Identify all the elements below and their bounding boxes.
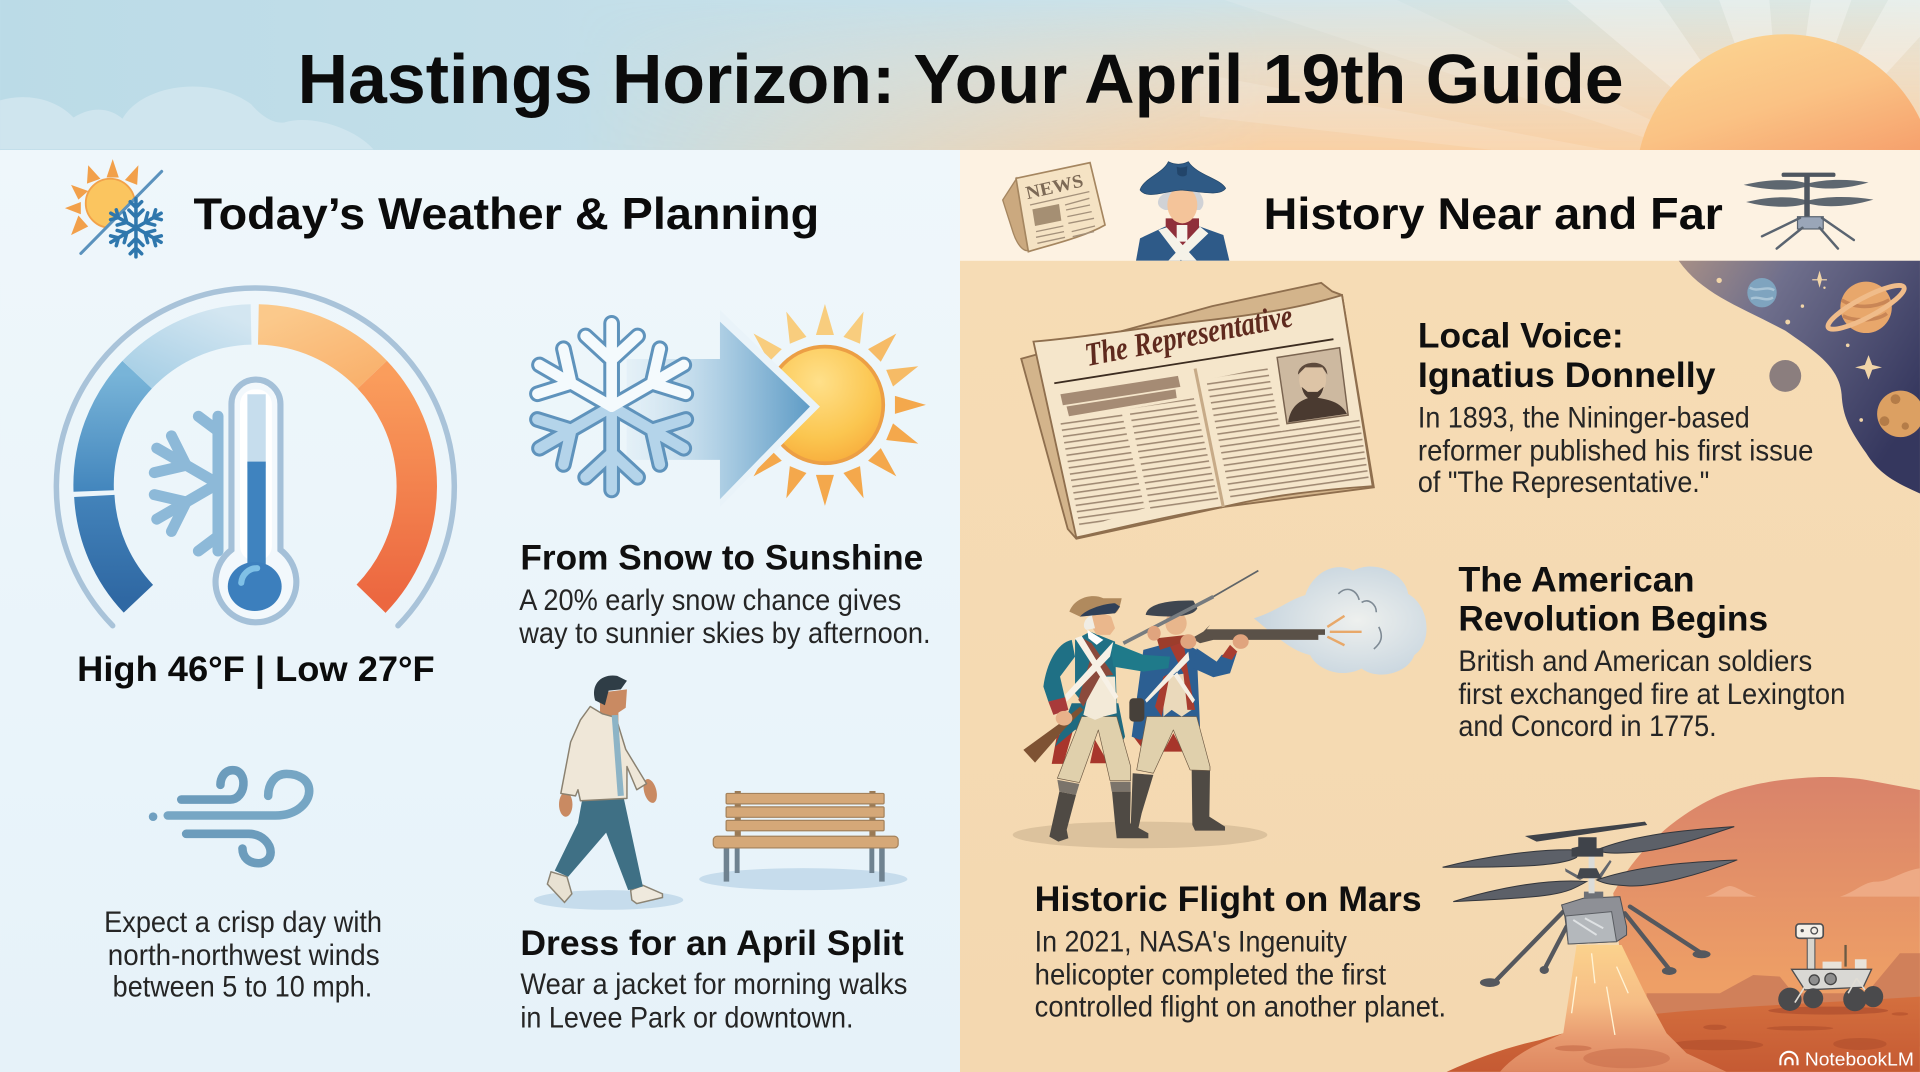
icon: thermometer — [216, 380, 296, 622]
text block: snow to sunshine: From Snow to Sunshine — [520, 537, 923, 577]
panel header: history — [960, 150, 1920, 261]
firing musket — [1192, 625, 1325, 643]
smoke cloud — [1254, 566, 1427, 675]
text block: mars flight: controlled flight on another planet. — [1035, 990, 1446, 1023]
illustration: The Representative newspaper — [1021, 283, 1374, 539]
text block: american revolution: and Concord in 1775. — [1458, 710, 1717, 743]
icon: walker — [534, 676, 683, 910]
hands — [559, 792, 572, 817]
snowflake — [526, 323, 697, 490]
text block: dress for april: in Levee Park or downtown. — [520, 1001, 853, 1034]
icon: colonial figure — [1136, 162, 1229, 261]
illustration: Ingenuity helicopter — [1443, 822, 1737, 987]
text block: mars flight: Historic Flight on Mars — [1035, 879, 1422, 919]
text block: local voice: Ignatius Donnelly — [1418, 355, 1716, 395]
text block: winds: north-northwest winds — [108, 939, 380, 972]
watermark: NotebookLM: NotebookLM — [1805, 1048, 1914, 1069]
text block: snow to sunshine: way to sunnier skies by afternoon. — [518, 617, 931, 650]
text block: local voice: Local Voice: — [1418, 316, 1624, 356]
text block: winds: between 5 to 10 mph. — [113, 971, 372, 1004]
text block: american revolution: first exchanged fire at Lexington — [1458, 678, 1845, 711]
text block: american revolution — [1458, 559, 1845, 743]
ringed planet — [1840, 282, 1892, 333]
text block: local voice — [1418, 316, 1813, 499]
sun rays — [1200, 0, 1920, 150]
front soldier — [1023, 596, 1170, 842]
temperature readout: High 46°F | Low 27°F — [77, 649, 435, 689]
text block: local voice: In 1893, the Nininger-based — [1418, 401, 1750, 434]
illustration: soldiers firing — [1013, 571, 1325, 848]
text block: american revolution: Revolution Begins — [1458, 599, 1768, 639]
portrait — [1277, 348, 1348, 424]
panel: history — [960, 261, 1920, 1072]
text block: snow to sunshine — [518, 537, 931, 650]
icon: snow to sun arrow — [526, 304, 926, 507]
illustration: rover — [1768, 924, 1888, 1015]
back soldier — [1129, 601, 1237, 831]
text block: mars flight: helicopter completed the first — [1035, 958, 1386, 991]
moon — [1769, 360, 1801, 392]
icon: half snowflake — [154, 416, 218, 551]
cratered planet — [1877, 391, 1920, 437]
icon: sun and snowflake — [65, 159, 165, 257]
stars — [1716, 271, 1882, 422]
text block: snow to sunshine: A 20% early snow chance gives — [519, 584, 901, 617]
bayonet musket — [1123, 597, 1213, 643]
title: Hastings Horizon: Your April 19th Guide — [298, 40, 1624, 118]
text block: winds — [104, 906, 382, 1004]
masthead title: The Representative — [1082, 298, 1296, 374]
text block: local voice: of "The Representative." — [1418, 466, 1709, 499]
panel: weather and planning — [0, 150, 960, 1072]
sun rays — [747, 304, 926, 506]
trousers — [555, 796, 643, 890]
text columns — [1060, 376, 1180, 405]
clouds — [0, 87, 373, 149]
thrust beam — [1500, 945, 1727, 1072]
heading: history: History Near and Far — [1264, 190, 1723, 239]
shoes — [547, 872, 572, 902]
blue planet — [1747, 278, 1777, 307]
space backdrop — [1679, 261, 1920, 493]
text block: mars flight — [1035, 879, 1446, 1023]
header banner — [0, 0, 1920, 150]
text block: dress for april: Dress for an April Split — [520, 923, 904, 963]
illustration: mars landscape — [1447, 777, 1920, 1072]
temperature gauge — [56, 288, 454, 626]
text block: dress for april: Wear a jacket for morning walks — [520, 968, 907, 1001]
header sun — [1640, 34, 1920, 150]
icon: small newspaper: NEWS — [1024, 171, 1085, 204]
text block: local voice: reformer published his first issue — [1418, 434, 1813, 467]
text block: american revolution: British and American soldiers — [1458, 645, 1812, 678]
icon: wind — [149, 770, 309, 863]
heading: weather: Today’s Weather & Planning — [193, 190, 819, 239]
head — [598, 689, 627, 725]
text block: dress for april — [520, 923, 907, 1034]
jacket — [561, 707, 647, 801]
icon: small newspaper — [1003, 163, 1105, 252]
text block: winds: Expect a crisp day with — [104, 906, 382, 939]
icon: small helicopter — [1744, 173, 1873, 249]
icon: park bench — [699, 791, 907, 890]
text block: mars flight: In 2021, NASA's Ingenuity — [1035, 925, 1347, 958]
text block: american revolution: The American — [1458, 559, 1695, 599]
